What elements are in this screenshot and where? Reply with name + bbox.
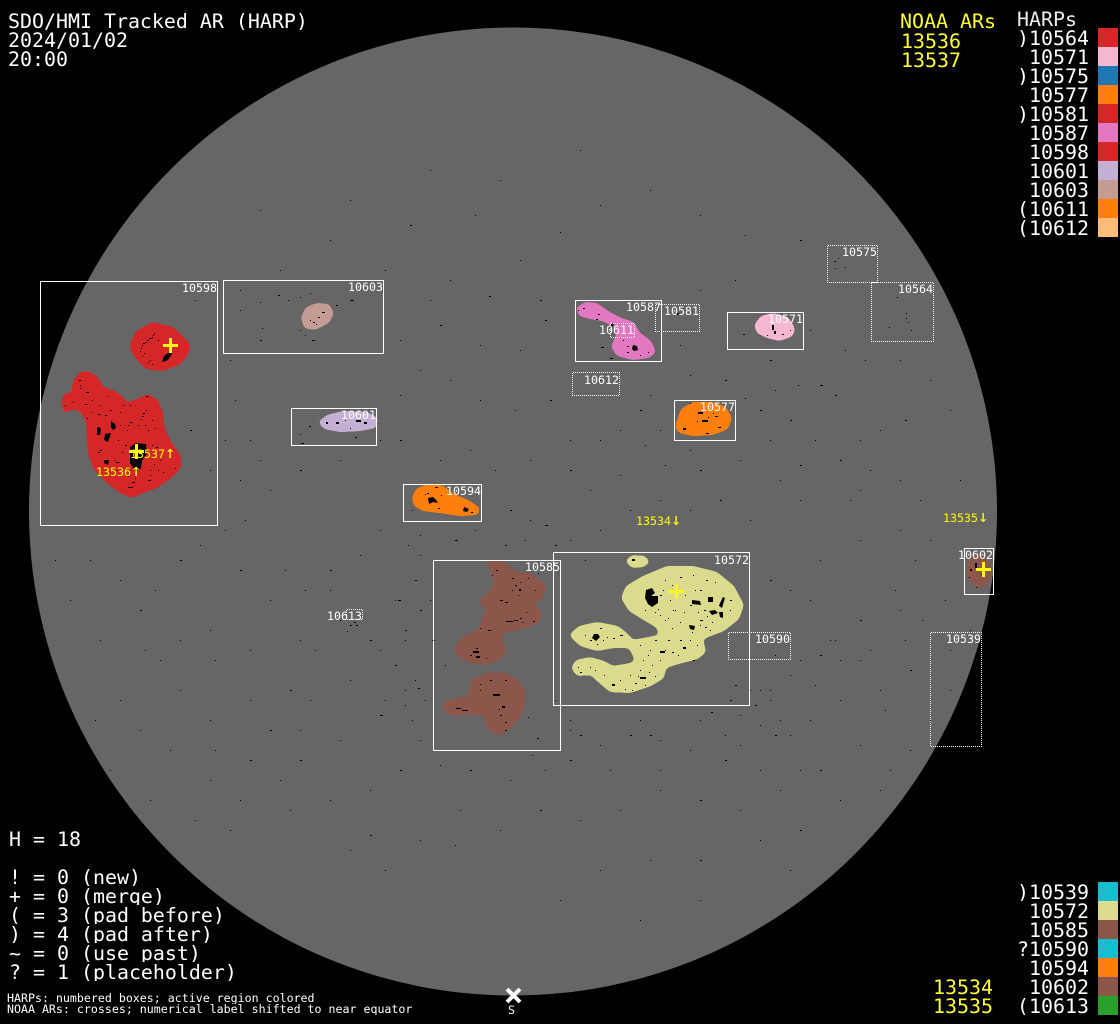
region: HARP 10539	[930, 632, 982, 746]
HARP label 10598: 10598	[182, 281, 217, 295]
HARP legend top	[1017, 10, 1118, 237]
swatch 10590	[1098, 939, 1118, 958]
region: HARP 10571	[728, 312, 804, 350]
region: HARP 10587	[576, 300, 662, 362]
swatch 10594	[1098, 958, 1118, 977]
swatch 10572	[1098, 901, 1118, 920]
region: HARP 10613	[327, 609, 362, 632]
NOAA label 13536: 13536↑	[96, 461, 141, 481]
region: HARP 10602	[958, 548, 994, 594]
NOAA cross 13537	[129, 444, 144, 459]
region: HARP 10601	[292, 408, 378, 446]
swatch 10601	[1098, 161, 1118, 180]
region: HARP 10612	[572, 372, 620, 396]
HARP label 10594: 10594	[446, 484, 481, 498]
region: HARP 10590	[728, 632, 790, 660]
HARP label 10611: 10611	[599, 323, 634, 337]
NOAA cross 13535	[976, 562, 991, 577]
swatch 10612	[1098, 218, 1118, 237]
HARP label 10539: 10539	[946, 632, 981, 646]
HARP box 10572	[554, 552, 750, 706]
HARP box 10601	[292, 408, 376, 446]
region: HARP 10575	[828, 245, 878, 282]
magnetogram speckles	[55, 150, 971, 920]
region: HARP 10603	[224, 280, 384, 354]
NOAA label 13534: 13534↓	[636, 510, 681, 530]
HARP label 10612: 10612	[584, 373, 619, 387]
swatch 10581	[1098, 104, 1118, 123]
HARP label 10602: 10602	[958, 548, 993, 562]
HARP box 10612	[572, 372, 620, 396]
HARP label 10577: 10577	[700, 400, 735, 414]
NOAA AR list bottom	[933, 978, 993, 1015]
swatch 10602	[1098, 977, 1118, 996]
south pole marker	[507, 989, 520, 1002]
swatch 10571	[1098, 47, 1118, 66]
HARP label 10603: 10603	[348, 280, 383, 294]
swatch 10598	[1098, 142, 1118, 161]
active region north blob	[129, 322, 189, 371]
HARP label 10585: 10585	[525, 560, 560, 574]
region: HARP 10572	[554, 552, 750, 706]
swatch 10613	[1098, 996, 1118, 1015]
HARP label 10564: 10564	[898, 282, 933, 296]
region: HARP 10577	[674, 400, 736, 440]
NOAA label 13535: 13535↓	[943, 507, 988, 527]
region: HARP 10585	[434, 560, 560, 750]
HARP box 10575	[828, 246, 878, 282]
HARP box 10581	[656, 304, 700, 332]
swatch 10539	[1098, 882, 1118, 901]
HARP label 10601: 10601	[341, 408, 376, 422]
title block	[8, 12, 308, 68]
HARP box 10539	[930, 632, 982, 746]
HARP label 10571: 10571	[768, 312, 803, 326]
NOAA AR list top	[900, 12, 996, 69]
swatch 10564	[1098, 28, 1118, 47]
swatch 10611	[1098, 199, 1118, 218]
swatch 10585	[1098, 920, 1118, 939]
HARP label 10587: 10587	[626, 300, 661, 314]
swatch 10603	[1098, 180, 1118, 199]
HARP label 10572: 10572	[714, 553, 749, 567]
region: HARP 10611	[599, 323, 634, 338]
HARP legend bottom	[1017, 882, 1118, 1015]
NOAA cross 13536	[163, 338, 178, 353]
HARP box 10603	[224, 280, 384, 354]
HARP box 10590	[728, 632, 790, 660]
sunspots	[97, 351, 172, 472]
HARP box 10611	[610, 324, 634, 338]
swatch 10587	[1098, 123, 1118, 142]
region: HARP 10598	[40, 281, 218, 526]
HARP box 10564	[872, 282, 934, 342]
active region south blob	[61, 371, 181, 498]
region: HARP 10564	[872, 282, 934, 342]
sunspot speckle	[65, 334, 176, 488]
HARP box 10587	[576, 300, 662, 362]
HARP label 10613: 10613	[327, 609, 362, 623]
HARP box 10613	[346, 610, 362, 620]
swatch 10577	[1098, 85, 1118, 104]
HARP box 10577	[674, 400, 736, 440]
NOAA label 13537: 13537↑	[130, 443, 175, 463]
HARP label 10581: 10581	[664, 304, 699, 318]
HARP box 10598	[40, 282, 218, 526]
HARP box 10594	[404, 484, 482, 522]
summary counts	[9, 830, 237, 981]
HARP box 10571	[728, 312, 804, 350]
HARP box 10585	[434, 560, 560, 750]
HARP box 10602	[964, 548, 994, 594]
swatch 10575	[1098, 66, 1118, 85]
region: HARP 10594	[404, 484, 482, 522]
footnote	[7, 993, 412, 1015]
NOAA cross 13534	[669, 584, 684, 599]
HARP label 10590: 10590	[755, 632, 790, 646]
region: HARP 10581	[656, 304, 700, 332]
HARP label 10575: 10575	[842, 245, 877, 259]
south label: S	[508, 1003, 515, 1017]
